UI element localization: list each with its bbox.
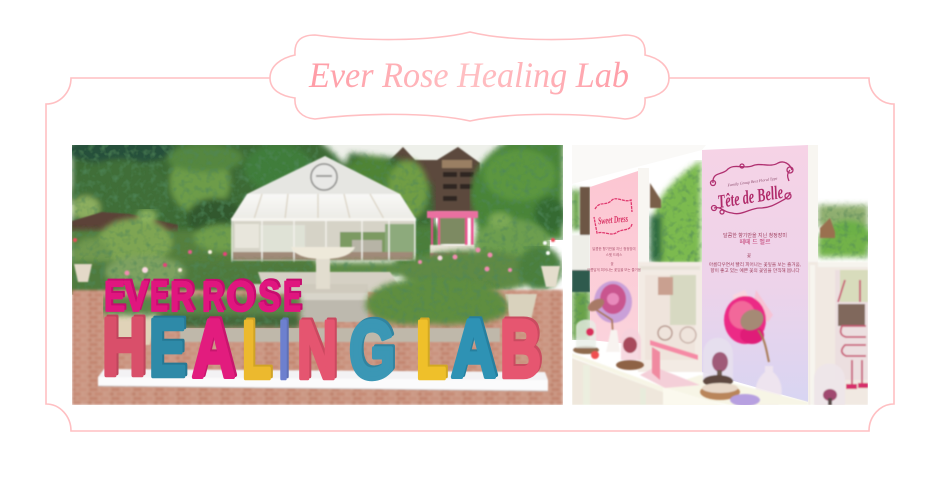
bell jar: large left [700,338,760,406]
flower pots [74,264,560,345]
bell jar: middle [616,328,644,370]
pink gazebo [427,211,478,263]
distant buildings [572,183,835,292]
sign: Ever Rose: V [124,273,148,321]
sign: Healing Lab: L [242,305,271,396]
banner copy: Tete de Belle: 아름다우면서 빨리 피어나는 꽃잎을 보는 즐거움, [709,261,801,268]
banner copy: Tete de Belle: 꽃 [747,253,751,259]
trees behind banners [572,160,872,340]
funnel and bottle [737,305,782,405]
hotel building [390,147,480,212]
sign: Healing Lab: G [349,305,395,396]
sign: Healing Lab: B [500,304,541,395]
banner: Sweet Dress [587,171,641,345]
sign: Ever Rose: E [104,273,125,321]
banner copy: Tete de Belle: 떼떼 드 벨르 [740,238,771,246]
green shrubs [103,278,508,328]
sign: Healing Lab: I [279,305,288,396]
sign: Ever Rose: E [283,273,301,321]
title plaque [270,32,669,121]
glass shelves [572,353,808,407]
banner copy: Tete de Belle: 달콤한 향기만을 지닌 청정장미 [723,232,787,239]
rose blooms [73,238,555,276]
sign: Healing Lab: H [102,302,146,393]
sign: Healing Lab: A [192,304,235,395]
sign: Healing Lab: A [451,304,496,395]
hedges [70,209,550,295]
sign: Ever Rose [105,278,302,312]
banner title: Sweet Dress: Sweet Dress [598,214,629,227]
stone curb [180,328,500,342]
sign: Ever Rose: R [170,273,194,321]
photo: exhibition banners and display case [572,145,872,407]
sign: Ever Rose: E [150,273,168,321]
rose image [724,290,773,344]
banner copy: Sweet Dress: 아름답게 피어나는 꽃잎을 보는 즐거움 [587,267,641,272]
rose bushes [70,246,562,294]
brown roof [72,212,178,232]
sky [72,145,563,205]
rose image [594,281,632,323]
infographic canvas [45,31,895,432]
banner copy: Tete de Belle [709,232,801,274]
display case [638,262,868,405]
bell jar: left [573,319,599,359]
photo: garden with Healing Lab sign [65,136,566,405]
banner copy: Sweet Dress: 달콤한 향기만을 지닌 청정장미 [592,246,636,251]
brick paving [72,290,563,405]
title: Ever Rose Healing Lab [308,55,629,95]
background forest [72,145,436,240]
sign: Ever Rose: S [258,273,280,321]
banner copy: Sweet Dress: 꽃 [610,262,614,266]
pink card [652,347,660,380]
tent [231,156,416,262]
outer frame with concave corners [46,78,894,431]
sign: Ever Rose: R [202,273,224,321]
sign: Ever Rose: O [226,273,255,321]
large tree [470,140,566,240]
sign: Healing Lab: L [416,305,446,396]
banner copy: Sweet Dress: 스윗 드레스 [606,252,622,257]
sign: Healing Lab: E [149,303,186,394]
banner subtitle: Family Group Best Floral Type [726,175,778,188]
left pedestal and funnel [586,296,620,352]
sign base [98,369,548,391]
clock on tent [311,164,337,190]
banner copy: Sweet Dress [587,246,641,272]
banner title: Tete de Belle: Tête de Belle [716,182,785,213]
fountain [250,247,403,322]
sky [572,145,868,405]
sign: Healing Lab [104,314,542,382]
ornament: Tete de Belle vine frame [710,162,793,214]
white posts [638,145,818,270]
ornament: Sweet Dress vine frame [594,199,632,234]
banner: Tete de Belle [702,145,808,402]
sign: Healing Lab: N [297,305,337,396]
banner copy: Tete de Belle: 향이 좋고 있는 예쁜 꽃의 꽃잎을 만끽해 봅니다 [710,267,800,274]
bell jar: right [814,364,845,405]
canopy [572,145,706,184]
